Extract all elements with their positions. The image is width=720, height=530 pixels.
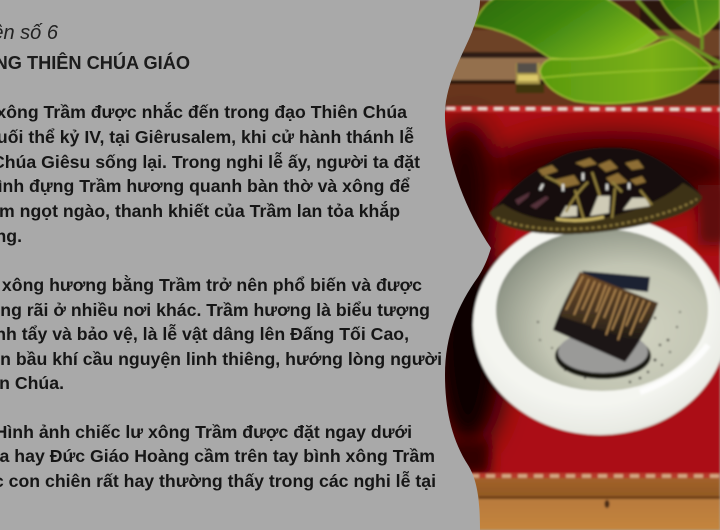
red velvet box — [430, 110, 720, 480]
openwork brass lid — [490, 147, 702, 234]
paragraph 1: Chúa Giêsu sống lại. Trong nghi lễ ấy, người ta đặt — [0, 151, 420, 172]
agarwood piece on charcoal — [553, 271, 658, 379]
wooden box background — [440, 0, 720, 112]
photo: incense burner on red box — [430, 0, 720, 530]
paragraph 2 — [0, 274, 442, 393]
ash specks in bowl — [537, 311, 681, 383]
brass hinge — [516, 63, 544, 93]
paragraph 1 — [0, 101, 420, 246]
white and red rope trim — [446, 106, 720, 112]
paragraph 3 — [0, 422, 436, 491]
white ceramic bowl — [473, 215, 720, 435]
paragraph 3: Hình ảnh chiếc lư xông Trầm được đặt ngay dưới — [0, 422, 412, 442]
lower stitched wooden edge — [470, 473, 720, 530]
grey curved text panel — [0, 0, 491, 530]
text block — [0, 22, 442, 491]
green leaves and stem — [473, 0, 720, 103]
